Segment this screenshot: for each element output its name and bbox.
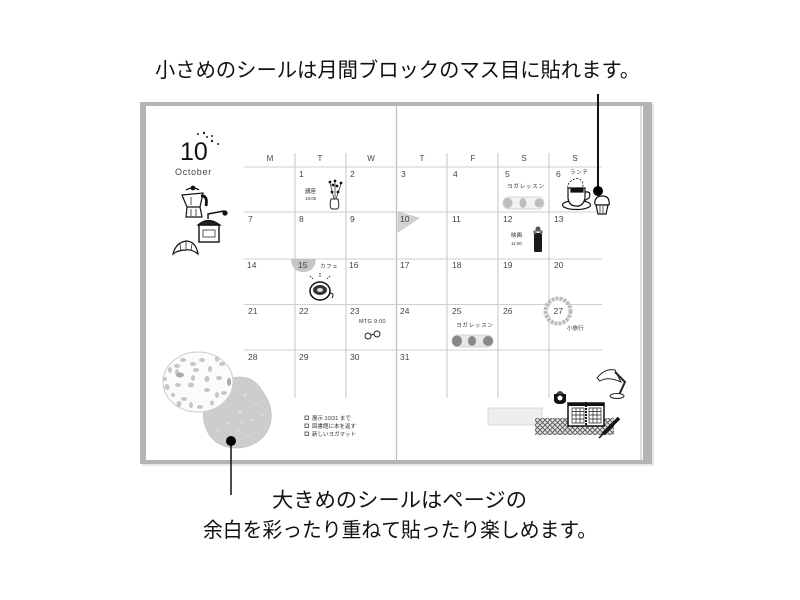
date numbers: 14 [247, 260, 257, 270]
note: movie [511, 231, 523, 246]
bottom caption [203, 489, 597, 542]
icon: pen [599, 418, 619, 438]
date numbers: 24 [400, 306, 410, 316]
sticker: lace circle: 27 [554, 306, 563, 316]
callout pointer: small stickers [593, 94, 603, 196]
to-do list [305, 415, 357, 438]
date numbers [247, 169, 564, 362]
to-do list: 新しいヨガマット [312, 430, 356, 438]
notebook [140, 102, 654, 466]
note: meeting: MTG 9:00 [359, 319, 386, 325]
date numbers: 16 [349, 260, 359, 270]
sticker: dotted circle [163, 352, 233, 412]
sticker: beans 5th [503, 197, 544, 209]
bottom caption: 余白を彩ったり重ねて貼ったり楽しめます。 [203, 519, 597, 542]
date numbers: 19 [503, 260, 513, 270]
date numbers: 31 [400, 352, 410, 362]
date numbers: 29 [299, 352, 309, 362]
icon: coffee grinder [198, 211, 227, 242]
tab stickers on dates [291, 212, 419, 272]
date numbers: 22 [299, 306, 309, 316]
date numbers: 7 [248, 214, 253, 224]
icon: flower vase [329, 180, 342, 209]
date numbers: 21 [248, 306, 258, 316]
weekday headers: S [572, 154, 578, 163]
top caption: 小さめのシールは月間ブロックのマス目に貼れます。 [155, 58, 640, 82]
icon: camera [554, 391, 566, 404]
sticker: beans 25th [452, 335, 493, 347]
icon: croissant [173, 241, 198, 254]
note: lunch: ランチ [570, 169, 588, 176]
weekday headers: T [318, 154, 323, 163]
icon: open planner [568, 402, 604, 426]
date numbers: 5 [505, 169, 510, 179]
note: movie: 11:00 [511, 241, 522, 246]
date numbers: 12 [503, 214, 513, 224]
date numbers: 15 [298, 260, 308, 270]
date numbers: 26 [503, 306, 513, 316]
note: lecture [305, 187, 317, 201]
date numbers: 13 [554, 214, 564, 224]
to-do list: 展示 10/31 まで [312, 415, 351, 422]
to-do list: 図書館に本を返す [312, 422, 357, 430]
weekday headers: T [420, 154, 425, 163]
date numbers: 11 [452, 214, 461, 224]
icon: latte cup [310, 273, 333, 300]
callout pointer: large stickers [226, 436, 236, 495]
weekday headers [267, 154, 578, 163]
icon: glasses [365, 331, 380, 339]
bottom caption: 大きめのシールはページの [272, 489, 527, 512]
sticker: blank label tape [488, 408, 542, 425]
date numbers: 2 [350, 169, 355, 179]
date numbers: 28 [248, 352, 258, 362]
month heading [175, 132, 219, 177]
sticker: lace circle [546, 298, 570, 324]
icon: muffin [595, 196, 609, 214]
note: lesson 25th: ヨガレッスン [456, 321, 494, 329]
calendar grid [244, 153, 602, 398]
weekday headers: W [367, 154, 375, 163]
date numbers: 18 [452, 260, 462, 270]
note: lecture: 講座 [305, 187, 317, 195]
note: cafe: カフェ [320, 263, 338, 270]
month heading: October [175, 167, 212, 177]
date numbers: 9 [350, 214, 355, 224]
weekday headers: F [471, 154, 476, 163]
date numbers: 25 [452, 306, 462, 316]
date numbers: 20 [554, 260, 564, 270]
note: travel: 小旅行 [567, 324, 584, 332]
note: lecture: 19:00 [305, 196, 317, 201]
date numbers: 8 [299, 214, 304, 224]
icon: bottle with flowers [533, 226, 543, 252]
icon: desk lamp [597, 370, 625, 398]
date numbers: 6 [556, 169, 561, 179]
date numbers: 30 [350, 352, 360, 362]
date numbers: 27 [554, 306, 564, 316]
date numbers: 17 [400, 260, 410, 270]
icon: coffee cup [562, 178, 590, 210]
note: lesson 5th: ヨガレッスン [507, 182, 545, 190]
date numbers: 4 [453, 169, 458, 179]
date numbers: 1 [299, 169, 304, 179]
date numbers: 23 [350, 306, 360, 316]
month heading: 10 [180, 138, 208, 166]
note: movie: 映画 [511, 231, 523, 239]
sticker: grey textured circle [203, 377, 271, 448]
icon: moka pot [182, 186, 206, 217]
date numbers: 10 [400, 214, 410, 224]
weekday headers: M [267, 154, 274, 163]
weekday headers: S [521, 154, 527, 163]
date numbers: 3 [401, 169, 406, 179]
sticker: patterned tape [535, 418, 614, 435]
